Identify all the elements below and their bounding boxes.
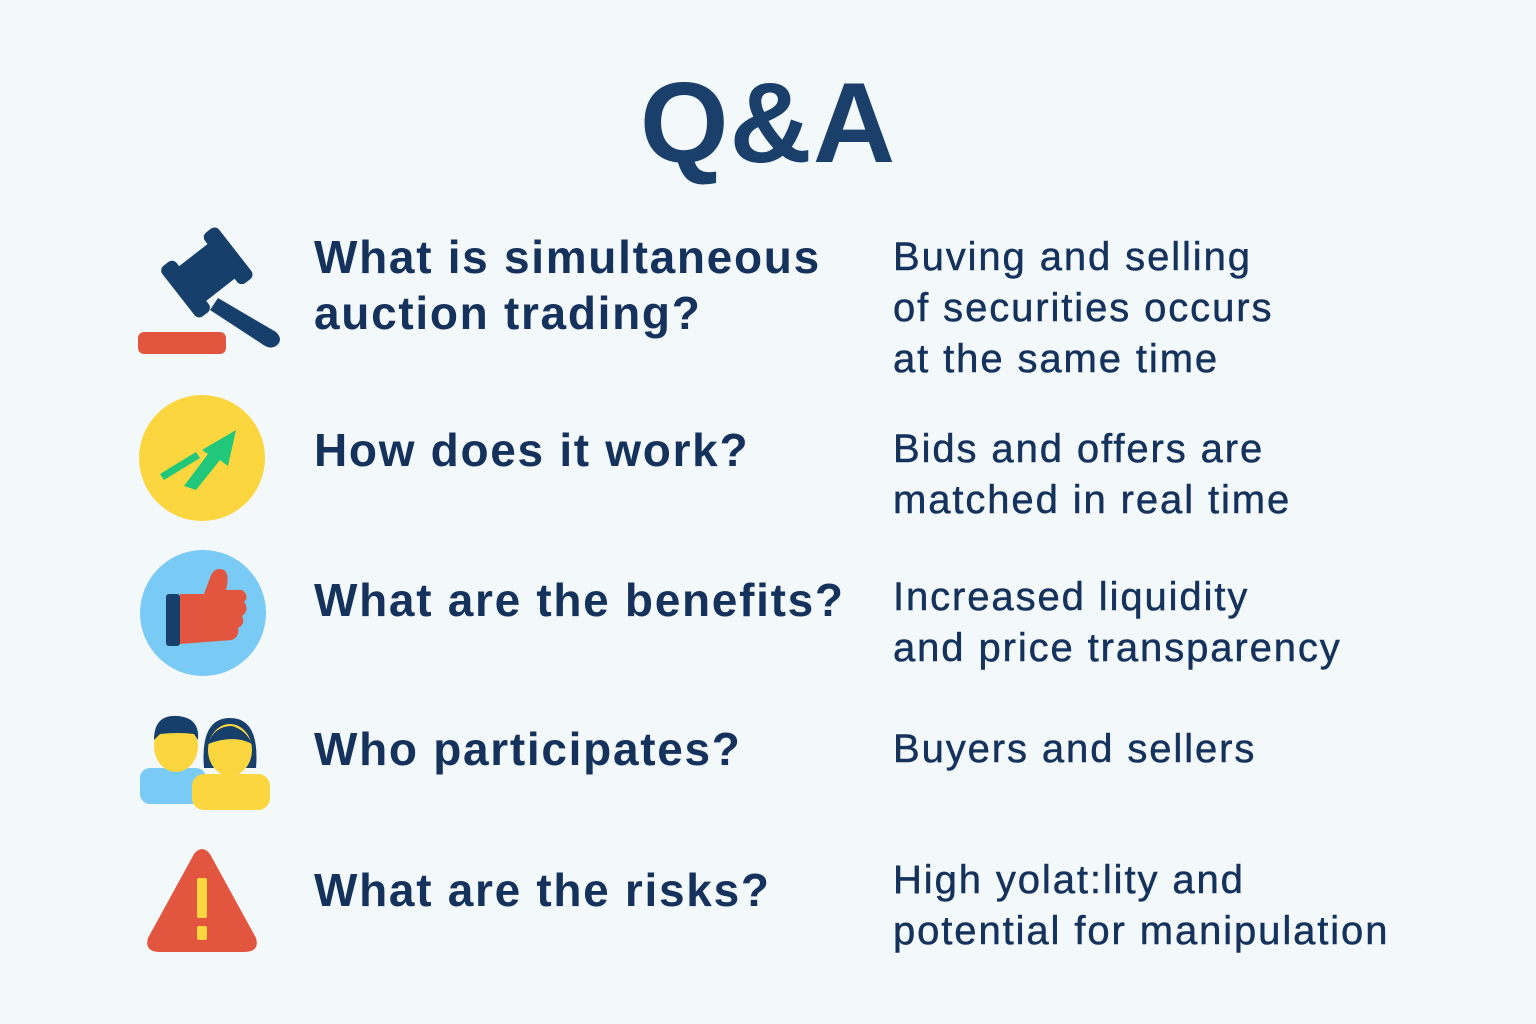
answer 5: potential for manipulation <box>893 909 1389 953</box>
question 1 <box>314 231 821 339</box>
answer 3: and price transparency <box>893 626 1342 670</box>
answer 5 <box>893 858 1389 953</box>
question 5: What are the risks? <box>314 864 771 916</box>
icon: chart arrow <box>139 395 265 521</box>
question 1: What is simultaneous <box>314 231 821 283</box>
answer 2: matched in real time <box>893 478 1291 522</box>
question 3: What are the benefits? <box>314 574 845 626</box>
title: Q&A <box>640 60 896 187</box>
icon: gavel <box>138 228 280 354</box>
answer 4: Buyers and sellers <box>893 727 1256 771</box>
answer 1: of securities occurs <box>893 286 1273 330</box>
answer 1: Buving and selling <box>893 235 1252 279</box>
answer 1 <box>893 235 1273 381</box>
icon: thumbs up <box>140 550 266 676</box>
icon: people <box>140 716 270 810</box>
answer 3 <box>893 575 1342 670</box>
question 2: How does it work? <box>314 424 749 476</box>
answer 2: Bids and offers are <box>893 427 1264 471</box>
answer 1: at the same time <box>893 337 1219 381</box>
answer 3: Increased liquidity <box>893 575 1249 619</box>
answer 2 <box>893 427 1291 522</box>
answer 5: High yolat:lity and <box>893 858 1245 902</box>
question 1: auction trading? <box>314 287 702 339</box>
icon: warning <box>147 849 257 952</box>
question 4: Who participates? <box>314 723 742 775</box>
